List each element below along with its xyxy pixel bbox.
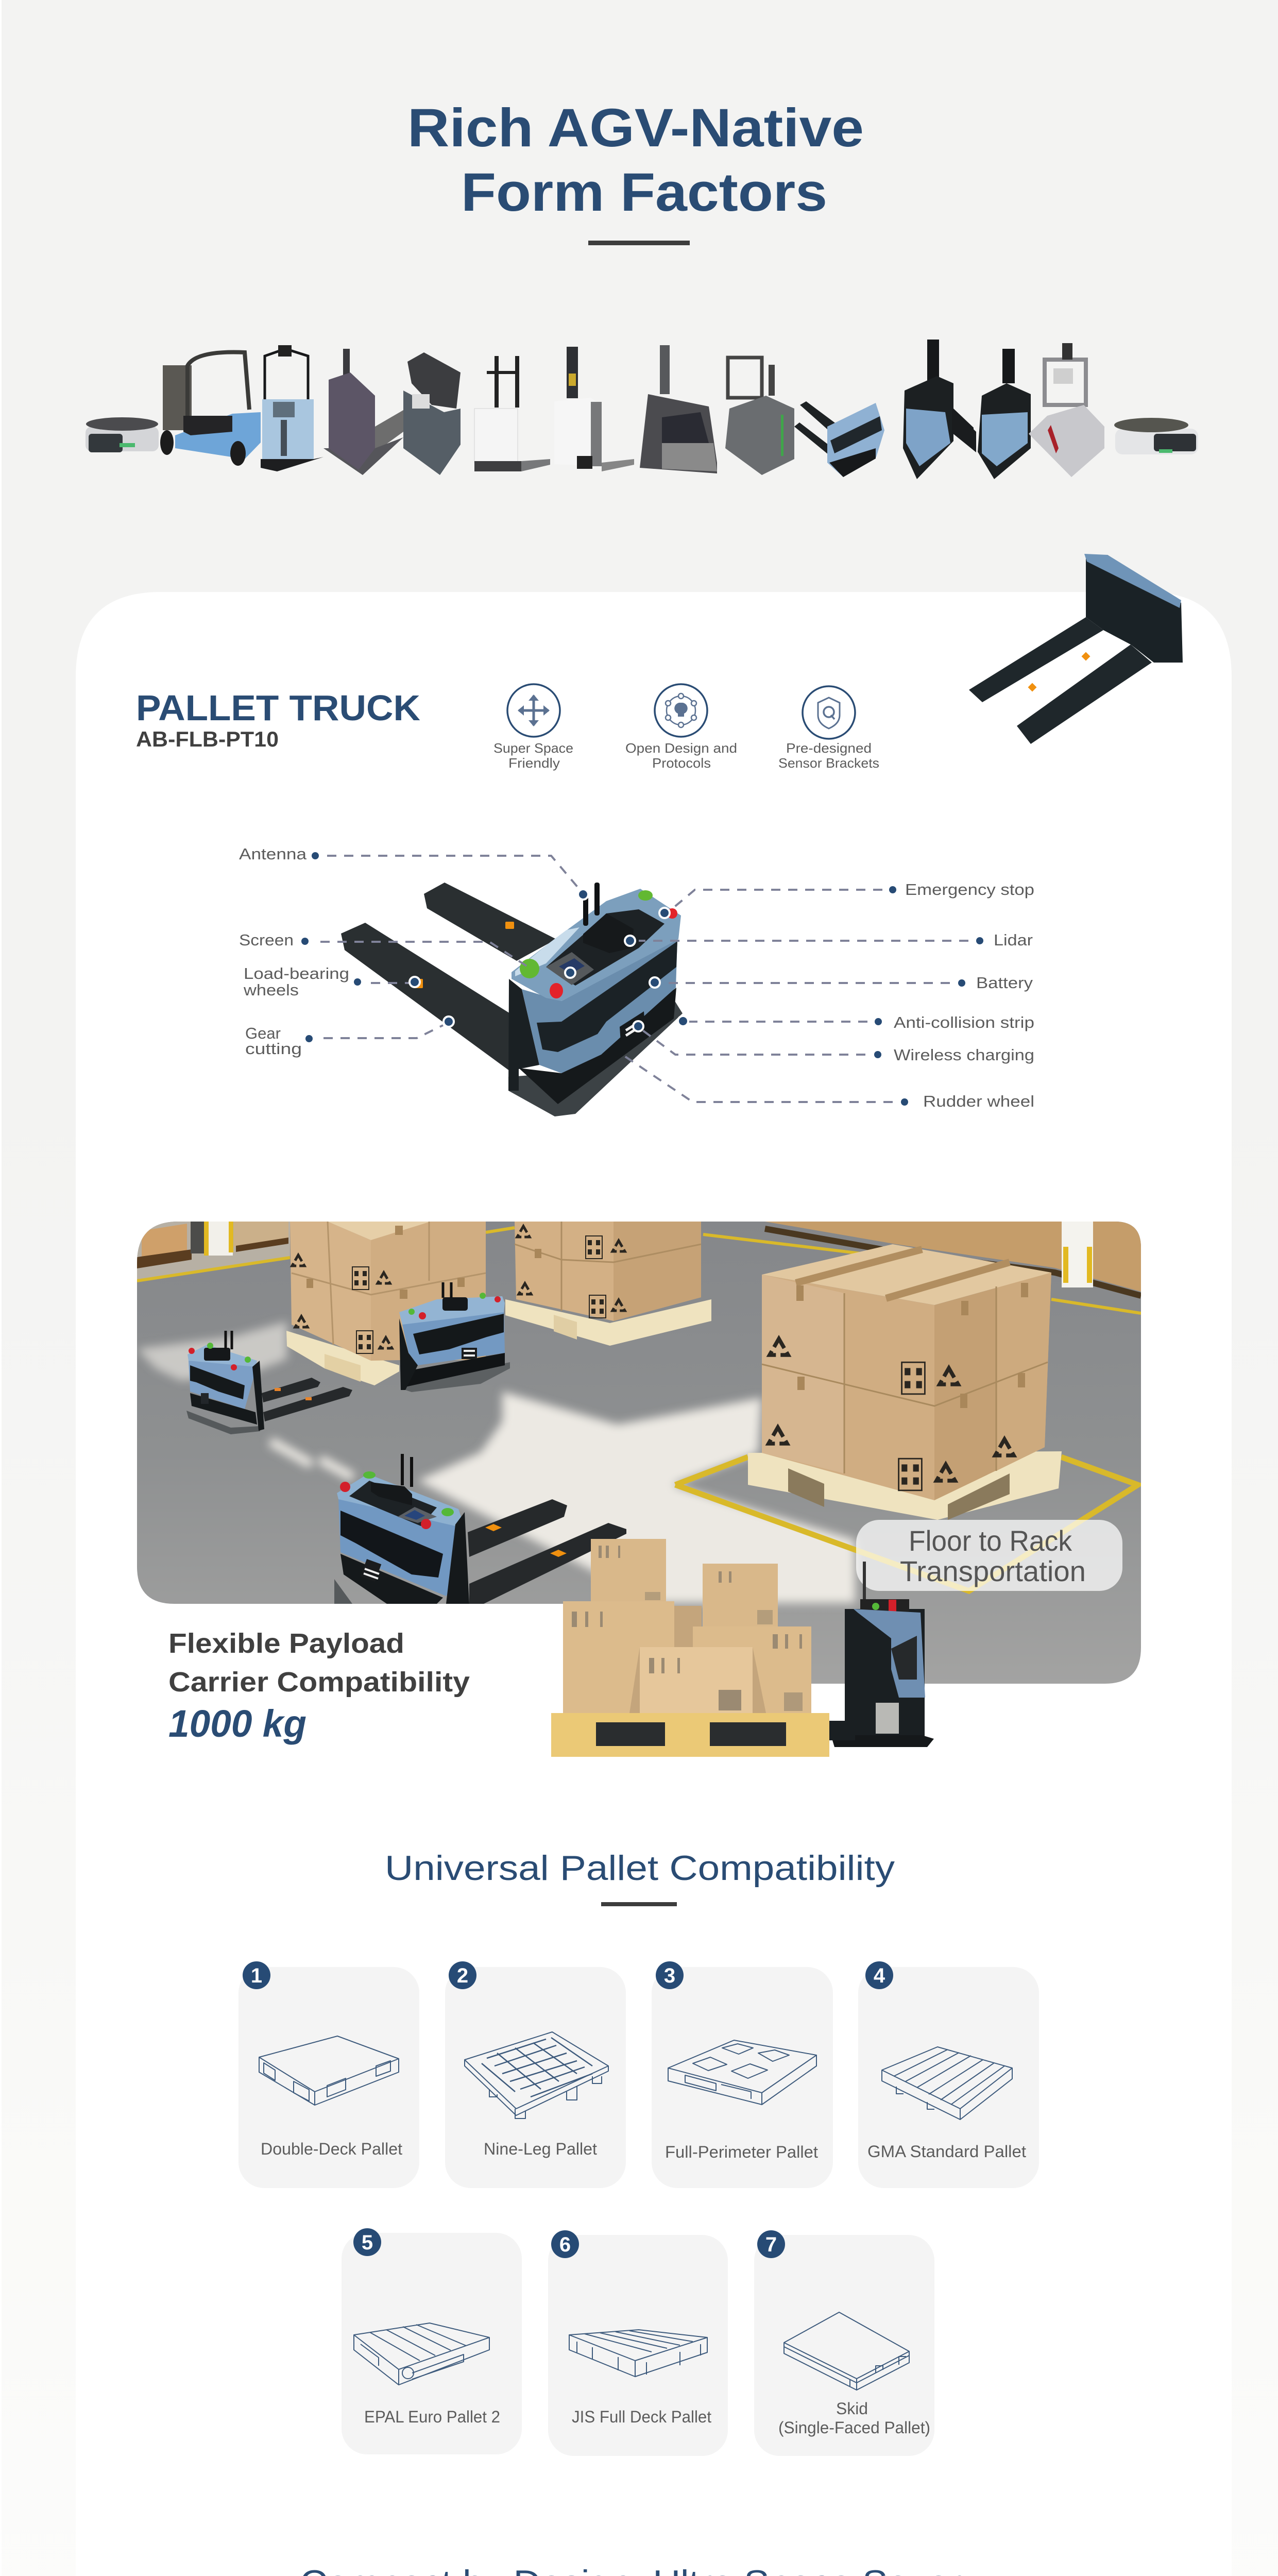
part labels — [239, 845, 1034, 1110]
pallet card 6: 6 — [559, 2233, 571, 2256]
feature: open design: Open Design and — [625, 740, 737, 756]
pallet card 5: EPAL Euro Pallet 2 — [364, 2408, 500, 2426]
part labels: Load-bearing — [244, 964, 349, 982]
callout rings — [301, 852, 983, 1106]
pallet card 2: Nine-Leg Pallet — [484, 2140, 597, 2158]
truck render top right — [969, 554, 1183, 744]
robot: round AMR right — [1114, 418, 1198, 454]
pallet card 3: Full-Perimeter Pallet — [665, 2143, 818, 2161]
part labels: Rudder wheel — [923, 1092, 1034, 1110]
pallet card 6: JIS Full Deck Pallet — [572, 2408, 711, 2426]
pallet card 1 — [238, 1961, 419, 2188]
product name heading: AB-FLB-PT10 — [136, 727, 279, 751]
side-view truck with pallet — [551, 1539, 934, 1757]
payload text: Flexible Payload — [168, 1628, 404, 1659]
part labels: Lidar — [994, 931, 1033, 949]
pallet card 1: Double-Deck Pallet — [261, 2140, 402, 2158]
pallet card 1: 1 — [251, 1964, 262, 1987]
side truck — [829, 1562, 934, 1747]
pallet card 7: 7 — [765, 2233, 777, 2256]
robot: black tower second — [952, 349, 1031, 479]
pallet card 5: 5 — [362, 2231, 373, 2254]
icon: move arrows — [507, 684, 560, 737]
robot lineup — [86, 340, 1198, 479]
product name heading — [136, 688, 420, 751]
pallet card 3 — [652, 1961, 833, 2188]
title — [407, 98, 864, 245]
robot: pallet truck — [794, 401, 884, 477]
robot: white and grey stacker — [1029, 343, 1104, 477]
part labels: Anti-collision strip — [894, 1013, 1034, 1031]
caption chip: floor to rack — [856, 1520, 1122, 1591]
truck forks — [341, 883, 556, 1071]
caption chip: floor to rack: Transportation — [900, 1555, 1086, 1587]
pallet card 2 — [445, 1961, 626, 2188]
payload text — [168, 1628, 470, 1745]
payload text: Carrier Compatibility — [168, 1667, 470, 1698]
feature: open design — [625, 684, 737, 771]
robot: counterbalance forklift — [160, 352, 261, 466]
robot: grey mast stacker — [725, 358, 794, 475]
heading: universal pallet compatibility: Universal Pallet Compatibility — [385, 1849, 895, 1888]
pallet card 3: 3 — [664, 1964, 675, 1987]
feature: open design: Protocols — [652, 755, 711, 771]
part labels: wheels — [243, 981, 299, 999]
robot: hoop-frame stacker — [261, 345, 323, 471]
feature: super space friendly — [493, 684, 573, 771]
large pallet stack — [748, 1244, 1062, 1520]
leader lines — [320, 856, 968, 1102]
robot: dark frame stacker — [403, 352, 461, 475]
feature: pre-designed brackets: Sensor Brackets — [778, 755, 879, 771]
pallet card 7 — [754, 2230, 934, 2456]
part labels: Screen — [239, 931, 294, 949]
part labels: Wireless charging — [894, 1046, 1034, 1064]
robot: grey stacker with forks — [323, 349, 403, 475]
truck body — [508, 883, 683, 1116]
photo truck front — [334, 1454, 626, 1604]
warehouse photo — [137, 1222, 1141, 1684]
pallet card 4 — [858, 1961, 1039, 2188]
robot: white tower stacker — [554, 347, 634, 471]
fork pads — [414, 922, 514, 988]
robot: round AMR left — [86, 417, 159, 452]
sunlit floor patches — [137, 1321, 855, 1603]
icon: EPAL pallet — [354, 2323, 489, 2385]
cardboard boxes — [563, 1539, 811, 1713]
pallet card 7: (Single-Faced Pallet) — [778, 2418, 930, 2437]
pallet card 4: 4 — [874, 1964, 885, 1987]
box stack B — [505, 1222, 711, 1346]
heading: universal pallet compatibility — [385, 1849, 895, 1906]
photo truck far left — [186, 1331, 352, 1434]
part labels: Emergency stop — [905, 880, 1034, 899]
icon: shield Q — [803, 686, 855, 739]
title: Form Factors — [461, 162, 827, 223]
robot: black stacker with tower — [640, 345, 717, 473]
pallet card 4: GMA Standard Pallet — [867, 2142, 1026, 2161]
icon: GMA pallet — [882, 2047, 1012, 2120]
yellow pallet — [551, 1713, 829, 1757]
icon: nine-leg pallet — [465, 2032, 608, 2119]
pallet card 2: 2 — [457, 1964, 468, 1987]
icon: bulb network — [655, 684, 707, 737]
part labels: Gear — [245, 1024, 281, 1042]
shelves background — [137, 1222, 1141, 1296]
robot: white stacker — [474, 356, 550, 471]
pallet card 6 — [548, 2230, 728, 2456]
feature: pre-designed brackets — [778, 686, 879, 771]
icon: skid pallet — [784, 2312, 909, 2390]
pallet card 5 — [342, 2228, 522, 2454]
icon: full-perimeter pallet — [668, 2040, 816, 2105]
feature: pre-designed brackets: Pre-designed — [786, 740, 872, 756]
part labels: Antenna — [239, 845, 307, 863]
feature: super space friendly: Super Space — [493, 740, 573, 756]
part labels: Battery — [976, 974, 1033, 992]
floor lines — [137, 1228, 1141, 1591]
box stack A — [286, 1222, 486, 1385]
white panel — [76, 592, 1232, 2576]
product name heading: PALLET TRUCK — [136, 688, 420, 728]
icon: double-deck pallet — [259, 2036, 399, 2105]
photo truck center — [399, 1282, 510, 1392]
robot: black tower with blue panel — [903, 340, 974, 479]
floor — [137, 1222, 1141, 1684]
caption chip: floor to rack: Floor to Rack — [909, 1524, 1072, 1557]
payload text: 1000 kg — [168, 1702, 306, 1745]
labelled truck diagram — [239, 845, 1034, 1116]
pallet card 7: Skid — [836, 2399, 868, 2418]
title: Rich AGV-Native — [407, 98, 864, 158]
part labels: cutting — [245, 1040, 302, 1058]
icon: JIS pallet — [569, 2330, 707, 2377]
feature: super space friendly: Friendly — [508, 755, 560, 771]
